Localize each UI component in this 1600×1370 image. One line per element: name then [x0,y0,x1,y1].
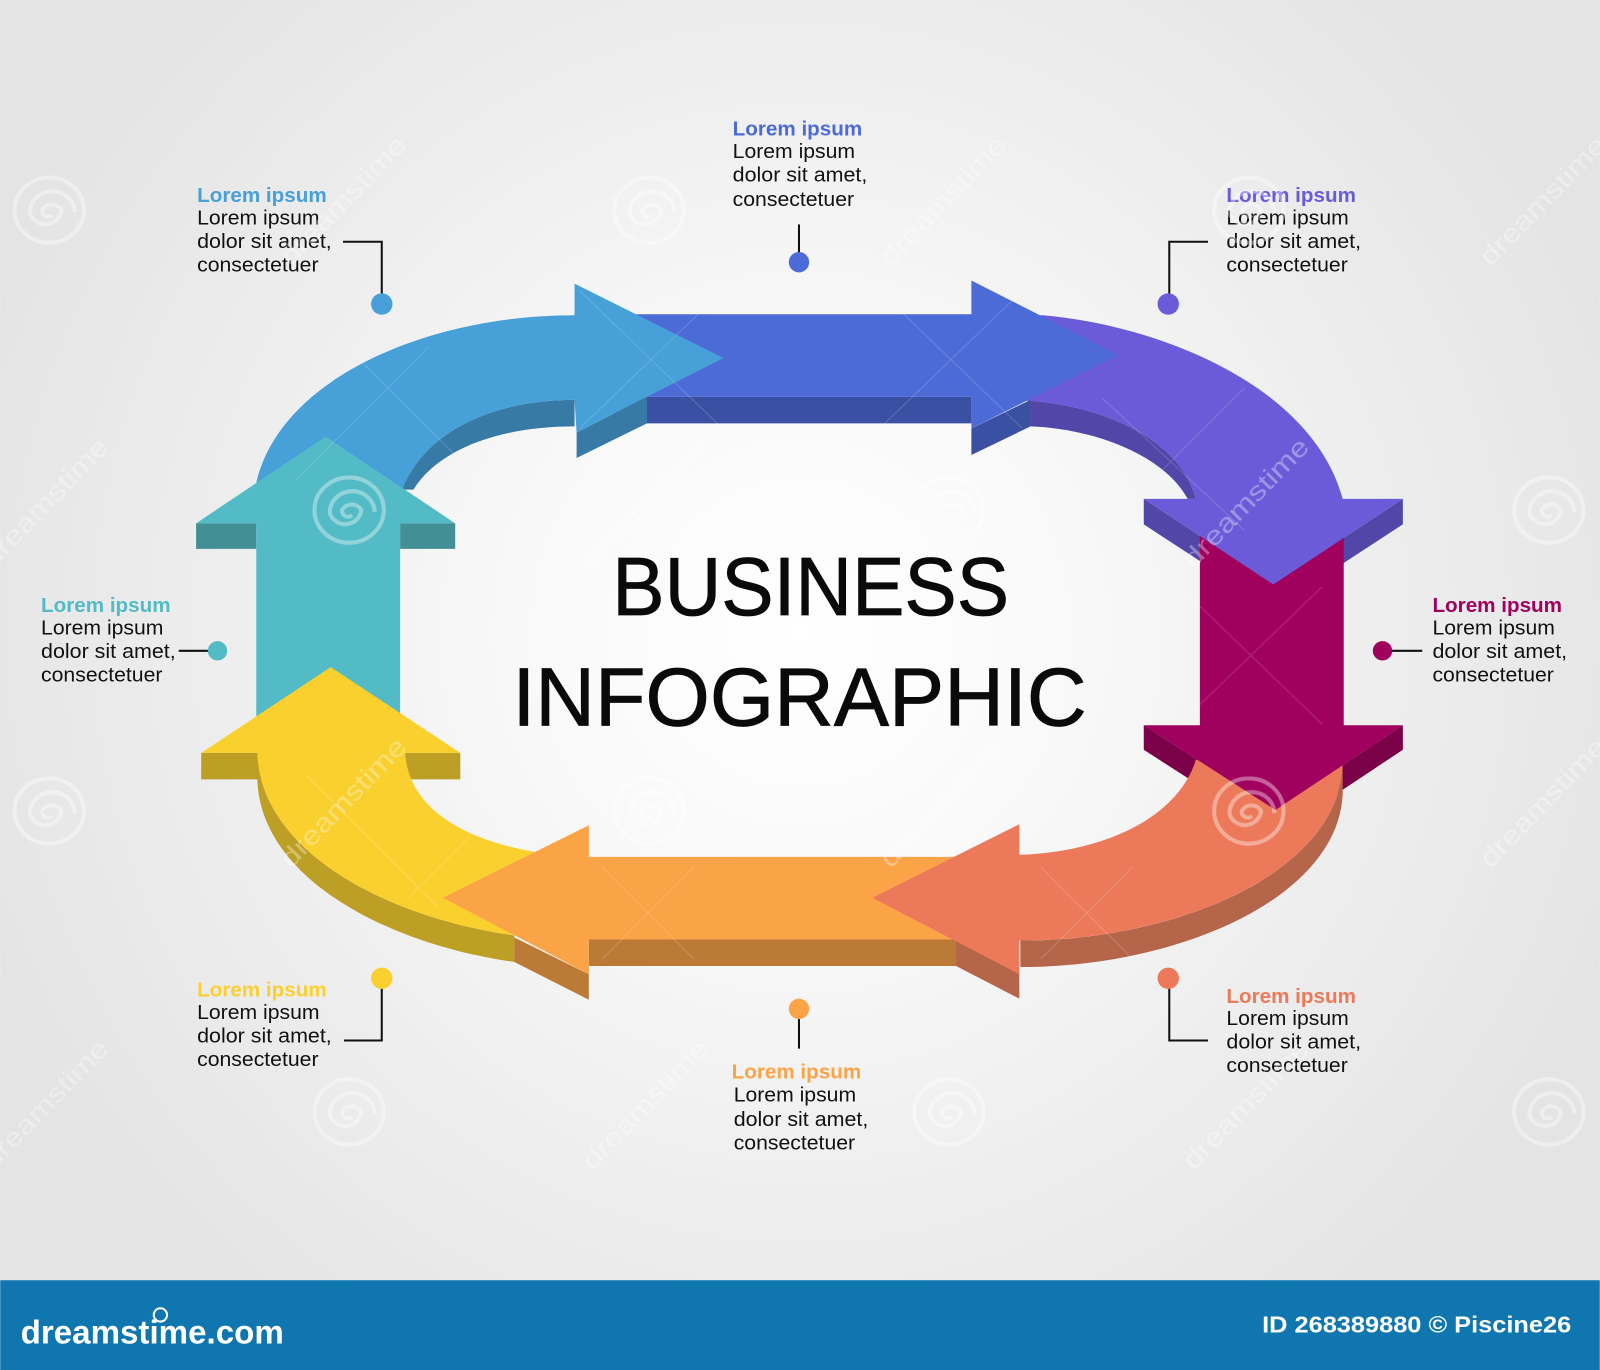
callout: yellow: consectetuer [197,1049,319,1071]
callout: light blue: consectetuer [197,254,319,276]
arrow: yellow [201,667,571,962]
arrow: magenta side [1144,725,1403,834]
callout: teal [41,595,227,686]
callout: indigo: consectetuer [733,189,854,211]
callout: orange: Lorem ipsum [734,1085,856,1107]
callout: magenta: Lorem ipsum [1432,595,1562,617]
callout: purple [1158,185,1361,315]
watermark: diagonal text: dreamstime [875,131,1012,271]
callout: magenta: dolor sit amet, [1432,641,1567,663]
callout: light blue [197,185,392,315]
title: INFOGRAPHIC [512,650,1087,743]
callout: teal: consectetuer [41,664,163,686]
arrow: light blue [256,284,723,510]
callout: indigo: dolor sit amet, [733,165,867,187]
arrow: indigo [612,281,1118,455]
banner credit: ID 268389880 © Piscine26 [1262,1311,1571,1337]
callout: yellow: Lorem ipsum [197,1002,320,1024]
callout: orange: dolor sit amet, [734,1109,868,1131]
callout: yellow: Lorem ipsum [197,980,327,1002]
callout: orange: Lorem ipsum [732,1061,861,1083]
banner logo text: dreamstime.com [21,1314,284,1351]
callout: coral: Lorem ipsum [1226,986,1356,1008]
watermark: diagonal text: dreamstime [577,1035,714,1175]
callout: coral [1158,968,1361,1077]
callout: purple: Lorem ipsum [1226,185,1356,207]
arrow: purple top face [1010,315,1403,585]
arrow: purple side [1144,499,1403,609]
arrow: orange [443,825,969,1000]
arrow: coral head [872,824,1031,999]
callout: teal: Lorem ipsum [41,595,171,617]
callout: coral: Lorem ipsum [1226,1008,1349,1030]
watermark: diagonal text: dreamstime [1475,131,1600,271]
callout: light blue: dolor sit amet, [197,231,332,253]
watermark: diagonal text [0,131,1600,1175]
footer banner [0,1280,1600,1370]
callout: purple: Lorem ipsum [1226,207,1349,229]
watermark: diagonal text: dreamstime [1475,733,1600,873]
arrow: magenta top face [1144,510,1403,810]
callout: coral: consectetuer [1226,1055,1348,1077]
callout: purple: dolor sit amet, [1226,231,1361,253]
watermark: diagonal text: dreamstime [1178,1035,1315,1175]
watermark: diagonal text: dreamstime [275,733,412,873]
callout: purple: consectetuer [1226,254,1348,276]
callout: teal: Lorem ipsum [41,618,163,640]
watermark: diagonal text: dreamstime [577,433,714,573]
callout: teal: dolor sit amet, [41,641,176,663]
callout: light blue: Lorem ipsum [197,185,327,207]
callout: indigo: Lorem ipsum [733,141,855,163]
callout: light blue: Lorem ipsum [197,207,320,229]
title: BUSINESS [612,540,1009,633]
watermark: spirals [15,177,1583,1145]
callout: orange: consectetuer [734,1133,855,1155]
callout: yellow: dolor sit amet, [197,1026,332,1048]
callout: indigo: Lorem ipsum [733,119,862,141]
callout: orange [732,999,868,1155]
callout: magenta [1373,595,1567,686]
callout: magenta: consectetuer [1432,664,1554,686]
arrow: teal [196,437,455,734]
watermark: diagonal text: dreamstime [275,131,412,271]
callout: indigo [733,119,867,272]
callout: yellow [197,968,392,1071]
arrow: coral body [1019,755,1343,967]
watermark: diagonal text: dreamstime [875,733,1012,873]
watermark: diagonal text: dreamstime [1178,433,1315,573]
callout: magenta: Lorem ipsum [1432,618,1555,640]
callout: coral: dolor sit amet, [1226,1032,1361,1054]
title [512,540,1087,743]
